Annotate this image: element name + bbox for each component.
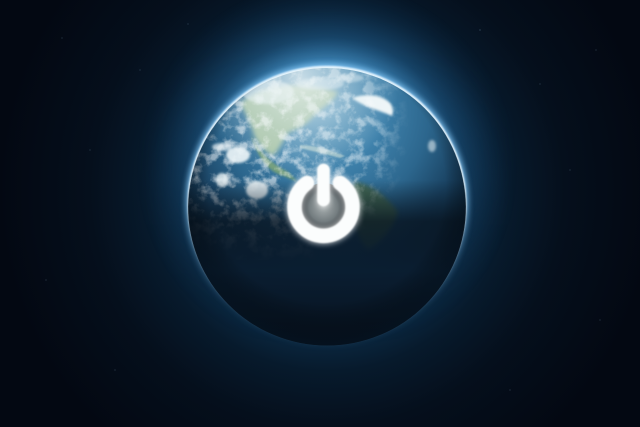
- greenland cloud mass: [352, 95, 393, 116]
- cloud highlights: [212, 74, 436, 199]
- globe base ocean: [188, 68, 466, 345]
- power symbol dark core: [300, 183, 348, 231]
- icon: power symbol: [294, 170, 353, 236]
- central america land: [252, 139, 296, 182]
- power symbol outer glow: [294, 170, 353, 236]
- polar highlight: [218, 68, 392, 170]
- power symbol glowing stroke: [294, 170, 353, 236]
- procedural cloud cover: [188, 68, 404, 245]
- earth surface details: [188, 68, 466, 346]
- caribbean islands: [300, 145, 345, 158]
- south america land: [352, 180, 397, 226]
- globe: [188, 68, 466, 346]
- limb shading: [188, 87, 466, 318]
- night-side shadow: [188, 182, 466, 346]
- stars: [46, 24, 600, 390]
- north america land: [240, 85, 338, 156]
- atmosphere glow: [160, 0, 494, 339]
